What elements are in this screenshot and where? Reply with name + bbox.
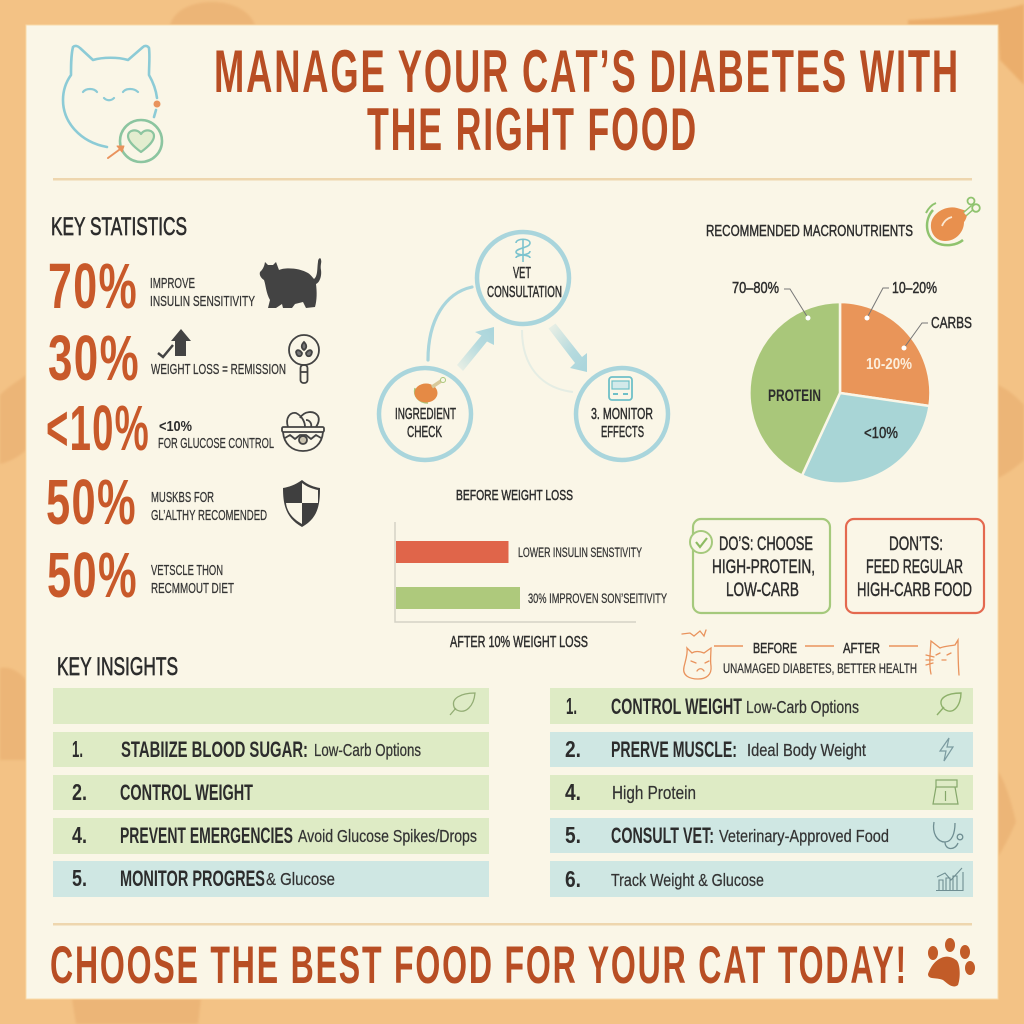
row: stabilize blood sugar: 1.	[72, 736, 83, 762]
list: left insights	[53, 688, 489, 897]
row: control weight	[550, 688, 973, 724]
stat: 30%: 30%	[48, 322, 140, 394]
node: vet consultation	[477, 232, 569, 324]
node: monitor effects	[576, 368, 668, 460]
row: preserve muscle: Ideal Body Weight	[747, 740, 866, 760]
heading: key insights: KEY INSIGHTS	[57, 653, 178, 681]
row: prevent emergencies: PREVENT EMERGENCIES	[120, 823, 293, 848]
icon: cat silhouette	[260, 258, 321, 308]
icon: chicken leg	[926, 198, 980, 245]
slice: fat	[802, 393, 930, 484]
pie labels and leader lines: 10-20%	[866, 356, 912, 373]
node: monitor effects: 3. MONITOR	[591, 406, 653, 423]
icon: weighing scale	[933, 780, 958, 804]
callout: do's	[690, 519, 830, 613]
row: preserve muscle: 2.	[565, 736, 581, 762]
callout: don'ts: DON’TS:	[889, 534, 943, 555]
bar: before	[396, 541, 508, 563]
row: consult vet: CONSULT VET:	[611, 823, 714, 848]
icon: plant magnifier	[289, 335, 319, 383]
stat: 70%	[48, 250, 255, 322]
row: control weight: CONTROL WEIGHT	[611, 694, 742, 719]
icon: check and up arrow	[158, 329, 191, 357]
title	[214, 38, 960, 163]
before and after strip: AFTER	[843, 640, 880, 657]
row: track weight	[550, 861, 973, 897]
stat: 30%	[48, 322, 286, 394]
stat: 50% muscle: 50%	[46, 466, 137, 538]
stat: <10%: <10%	[159, 418, 192, 435]
stat: 50% muscle: GL’ALTHY RECOMENDED	[151, 507, 267, 524]
icon: leaf	[937, 693, 961, 715]
node: monitor effects: EFFECTS	[601, 424, 644, 441]
before and after strip: UNAMAGED DIABETES, BETTER HEALTH	[723, 661, 917, 676]
row: high protein: 4.	[565, 779, 581, 805]
pie labels and leader lines: 10–20%	[892, 280, 937, 297]
row: control weight: 2.	[72, 779, 87, 805]
row: stabilize blood sugar	[53, 732, 489, 767]
stat: 50% vet: 50%	[47, 539, 138, 611]
node: vet consultation: VET	[513, 265, 531, 282]
callout: don'ts	[846, 519, 984, 613]
callout: don'ts: HIGH-CARB FOOD	[857, 580, 972, 601]
row: stabilize blood sugar: Low-Carb Options	[314, 740, 421, 760]
stat: <10%: <10%	[46, 392, 150, 464]
arrow: faint curve	[522, 330, 573, 392]
row: monitor progress: MONITOR PROGRES	[120, 866, 265, 891]
row: control weight	[53, 775, 489, 810]
node: ingredient check: CHECK	[407, 424, 442, 441]
before and after strip: BEFORE	[753, 640, 797, 657]
stat: 50% muscle: MUSKBS FOR	[151, 489, 214, 506]
icon: lightning bolt	[940, 738, 953, 761]
bar chart: insulin sensitivity: 30% IMPROVEN SON’SEITIVITY	[528, 591, 667, 606]
stat: 70%: 70%	[48, 250, 138, 322]
callout: do's: HIGH-PROTEIN,	[712, 557, 815, 578]
bar chart: insulin sensitivity: LOWER INSULIN SENSTIVITY	[518, 545, 642, 560]
icon: shield	[283, 480, 320, 527]
pie chart	[749, 302, 930, 484]
node: vet consultation: CONSULTATION	[487, 284, 562, 301]
stat: 30%: WEIGHT LOSS = REMISSION	[151, 362, 286, 378]
slice: carbs	[840, 302, 930, 406]
stat: 50% muscle	[46, 466, 267, 538]
panel: recommended macronutrients	[706, 198, 980, 484]
row: preserve muscle: PRERVE MUSCLE:	[611, 737, 737, 762]
pie labels and leader lines: 70–80%	[732, 280, 779, 297]
icon: stethoscope	[934, 822, 963, 849]
icon: sad cat	[682, 630, 711, 679]
bar chart: insulin sensitivity: AFTER 10% WEIGHT LOSS	[450, 634, 588, 651]
node: ingredient check	[379, 368, 471, 460]
row: consult vet: 5.	[565, 822, 581, 848]
slice: protein	[749, 302, 840, 476]
row: track weight: Track Weight & Glucose	[611, 870, 764, 890]
callout: do's: DO’S: CHOOSE	[719, 534, 813, 555]
icon: food bowl	[282, 412, 324, 451]
list: right insights	[550, 688, 973, 897]
row: track weight: 6.	[565, 866, 581, 892]
row: high protein	[550, 775, 973, 810]
stat: 50% vet: VETSCLE THON	[151, 562, 223, 579]
before and after strip	[682, 630, 959, 679]
bar: after	[396, 587, 520, 609]
pie labels and leader lines: PROTEIN	[768, 387, 821, 405]
row: preserve muscle	[550, 732, 973, 767]
row: control weight: 1.	[566, 693, 577, 719]
heading: key statistics: KEY STATISTICS	[51, 213, 187, 241]
row: monitor progress: & Glucose	[266, 869, 335, 889]
icon: caduceus	[516, 239, 530, 262]
arrow: vet to monitor	[548, 324, 587, 372]
icon: check mark	[690, 531, 712, 553]
icon: glucose monitor	[609, 377, 632, 400]
icon: happy cat	[926, 640, 959, 675]
callout: don'ts: FEED REGULAR	[866, 557, 963, 578]
arrow: ingredient to vet	[457, 327, 494, 371]
title: THE RIGHT FOOD	[367, 96, 698, 163]
pie labels and leader lines: CARBS	[931, 315, 972, 332]
row: control weight: Low-Carb Options	[746, 697, 859, 717]
icon: drumstick	[414, 378, 446, 403]
pie labels and leader lines	[732, 280, 972, 442]
heading: macronutrients: RECOMMENDED MACRONUTRIENTS	[706, 223, 913, 240]
row: control weight: CONTROL WEIGHT	[120, 780, 253, 805]
row: monitor progress: 5.	[72, 865, 87, 891]
bar chart: insulin sensitivity	[395, 488, 667, 651]
stat: 50% vet: RECMMOUT DIET	[151, 580, 234, 597]
row: high protein: High Protein	[612, 783, 696, 803]
row: prevent emergencies: 4.	[72, 822, 87, 848]
stat: 70%: IMPROVE	[150, 275, 195, 292]
stat: <10%: FOR GLUCOSE CONTROL	[158, 435, 274, 452]
row: consult vet	[550, 818, 973, 853]
bar chart: insulin sensitivity: BEFORE WEIGHT LOSS	[456, 488, 573, 504]
row: prevent emergencies	[53, 818, 489, 854]
row: stabilize blood sugar: STABIIZE BLOOD SUGAR:	[121, 737, 308, 762]
icon: cat logo with heart	[63, 46, 162, 162]
row: empty header with leaf	[53, 688, 489, 724]
node: ingredient check: INGREDIENT	[395, 406, 456, 423]
arrow: curved return	[428, 287, 472, 360]
row: consult vet: Veterinary-Approved Food	[719, 826, 889, 846]
icon: leaf	[450, 693, 475, 715]
icon: growth chart	[936, 868, 963, 890]
stat: 70%: INSULIN SENSITIVITY	[150, 293, 255, 310]
callout: do's: LOW-CARB	[726, 580, 799, 601]
panel: key statistics	[46, 213, 324, 611]
row: monitor progress	[53, 861, 489, 897]
icon: paw print	[928, 938, 975, 986]
process cycle diagram	[379, 232, 668, 460]
row: prevent emergencies: Avoid Glucose Spikes/Drops	[298, 826, 477, 846]
pie labels and leader lines: <10%	[864, 425, 898, 442]
